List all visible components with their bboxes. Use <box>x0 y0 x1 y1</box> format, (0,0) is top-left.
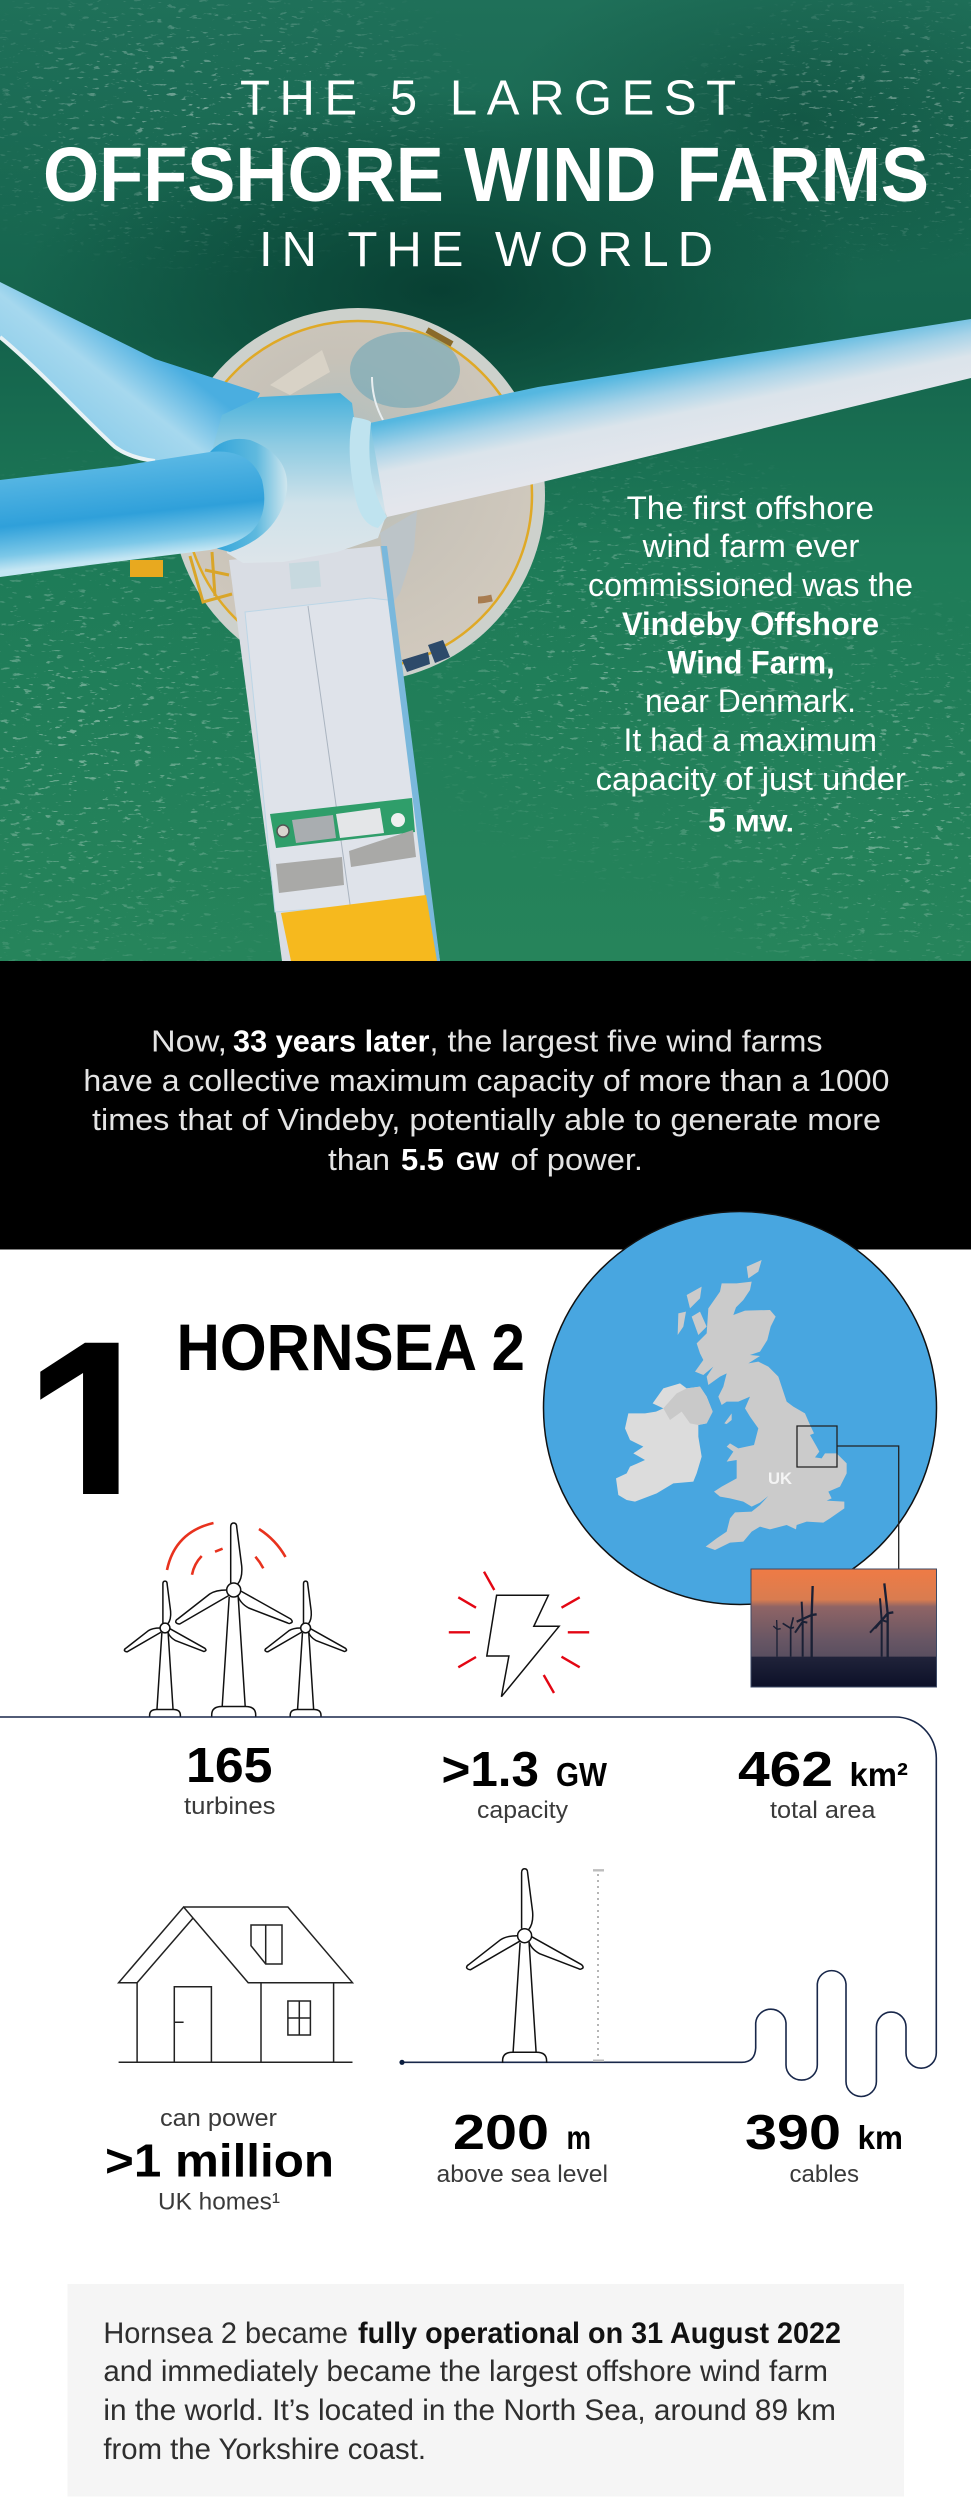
nacelle deck <box>229 546 440 961</box>
connector line with cable waves <box>0 1717 936 2096</box>
text block: Vindeby fact: Wind Farm, <box>668 645 835 681</box>
Scottish islands <box>678 1260 762 1424</box>
text block: 33 years later: GW <box>456 1148 499 1176</box>
panel: hero aerial photo of turbine over green sea <box>0 0 971 962</box>
stat: 165 turbines <box>184 1739 276 1820</box>
left blade <box>0 452 264 577</box>
text block: 33 years later <box>83 1024 889 1177</box>
stat: cables <box>745 2106 903 2188</box>
stat: homes powered: can power <box>160 2105 277 2132</box>
stat: 165 turbines: 165 <box>186 1739 272 1793</box>
text block: Vindeby fact: wind farm ever <box>642 528 860 564</box>
map label: UK: UK <box>768 1469 793 1488</box>
text block: 33 years later: 5.5 <box>401 1142 444 1177</box>
heading: Hornsea 2: HORNSEA 2 <box>176 1310 525 1384</box>
text block: Vindeby fact: It had a maximum <box>624 722 877 758</box>
text block: summary <box>103 2317 841 2466</box>
stat: height above sea level: m <box>566 2119 591 2156</box>
stat: capacity: GW <box>556 1756 608 1793</box>
text block: Vindeby fact: commissioned was the <box>588 567 913 603</box>
text block: summary: in the world. It’s located in the North Sea, around 89 km <box>103 2394 836 2427</box>
icon: house <box>119 1907 352 2062</box>
panel: black intro band <box>0 961 971 1250</box>
text block: Vindeby fact: near Denmark. <box>645 683 856 719</box>
left blade root collar <box>210 439 287 552</box>
right blade collar <box>350 417 387 528</box>
foundation disc <box>171 308 545 682</box>
cable end dot <box>399 2060 405 2065</box>
text block: Vindeby fact: Vindeby Offshore <box>622 606 879 642</box>
stat: capacity: >1.3 <box>442 1743 539 1797</box>
title <box>43 72 929 277</box>
stat: height above sea level: above sea level <box>436 2161 608 2188</box>
left walkway frame <box>130 552 232 602</box>
tower cylinder <box>380 511 417 607</box>
text block: Vindeby fact: The first offshore <box>627 490 874 526</box>
stat: total area: 462 <box>738 1743 833 1797</box>
text block: 33 years later: of power. <box>510 1142 643 1177</box>
icon: lightning bolt with red rays <box>449 1572 589 1697</box>
hub <box>213 393 386 563</box>
ranking number 1: 1 <box>23 1287 167 1576</box>
stat: cables: 390 <box>745 2106 841 2160</box>
text block: summary: from the Yorkshire coast. <box>103 2433 426 2466</box>
Ireland <box>616 1383 713 1502</box>
title: THE 5 LARGEST <box>240 72 736 126</box>
stat: 165 turbines: turbines <box>184 1793 276 1820</box>
sea background <box>0 0 971 962</box>
stat: homes powered: UK homes¹ <box>158 2189 280 2216</box>
icon: three wind turbines with red signal arcs <box>124 1523 347 1717</box>
text block: summary: Hornsea 2 became <box>103 2317 348 2350</box>
Great Britain <box>695 1282 847 1550</box>
text block: Vindeby fact <box>588 490 913 839</box>
stat: total area: total area <box>770 1797 876 1824</box>
photo inset: wind farm at sunset <box>751 1569 936 1687</box>
right blade <box>370 319 971 517</box>
text block: Vindeby fact: 5 <box>708 803 726 839</box>
text block: summary: fully operational on 31 August 2022 <box>358 2317 841 2350</box>
title: OFFSHORE WIND FARMS <box>43 132 929 218</box>
stat: homes powered <box>105 2105 334 2216</box>
stat: capacity <box>442 1743 608 1824</box>
stat: total area: km² <box>850 1756 908 1793</box>
stat: cables: cables <box>790 2161 859 2188</box>
upper-left blade <box>0 282 260 461</box>
text block: Vindeby fact: capacity of just under <box>596 761 906 797</box>
yellow deck end <box>281 895 437 961</box>
text block: 33 years later: Now, <box>151 1024 227 1059</box>
text block: 33 years later: , the largest five wind farms <box>430 1024 822 1059</box>
solar panels <box>402 640 450 672</box>
panel: Hornsea 2 summary <box>68 2284 904 2496</box>
stat: height above sea level <box>436 2106 608 2188</box>
stat: total area <box>738 1743 908 1824</box>
stat: height above sea level: 200 <box>453 2106 549 2160</box>
text block: 33 years later: times that of Vindeby, potentially able to generate more <box>92 1102 881 1137</box>
text block: 33 years later: have a collective maximum capacity of more than a 1000 <box>83 1063 889 1098</box>
text block: Vindeby fact: MW. <box>735 811 794 838</box>
title: IN THE WORLD <box>259 223 713 277</box>
stat: cables: km <box>858 2119 903 2156</box>
location box and connector <box>797 1426 899 1569</box>
stat: capacity: capacity <box>477 1797 568 1824</box>
Northern Ireland <box>663 1387 713 1425</box>
text block: summary: and immediately became the largest offshore wind farm <box>103 2355 828 2388</box>
stat: homes powered: >1 million <box>105 2135 334 2187</box>
text block: 33 years later: than <box>328 1142 390 1177</box>
deck hatch with green equipment <box>270 798 416 893</box>
icon: single turbine with height marker <box>467 1869 604 2063</box>
text block: 33 years later: 33 years later <box>233 1024 430 1059</box>
map: UK and Ireland in blue circle <box>544 1212 936 1604</box>
